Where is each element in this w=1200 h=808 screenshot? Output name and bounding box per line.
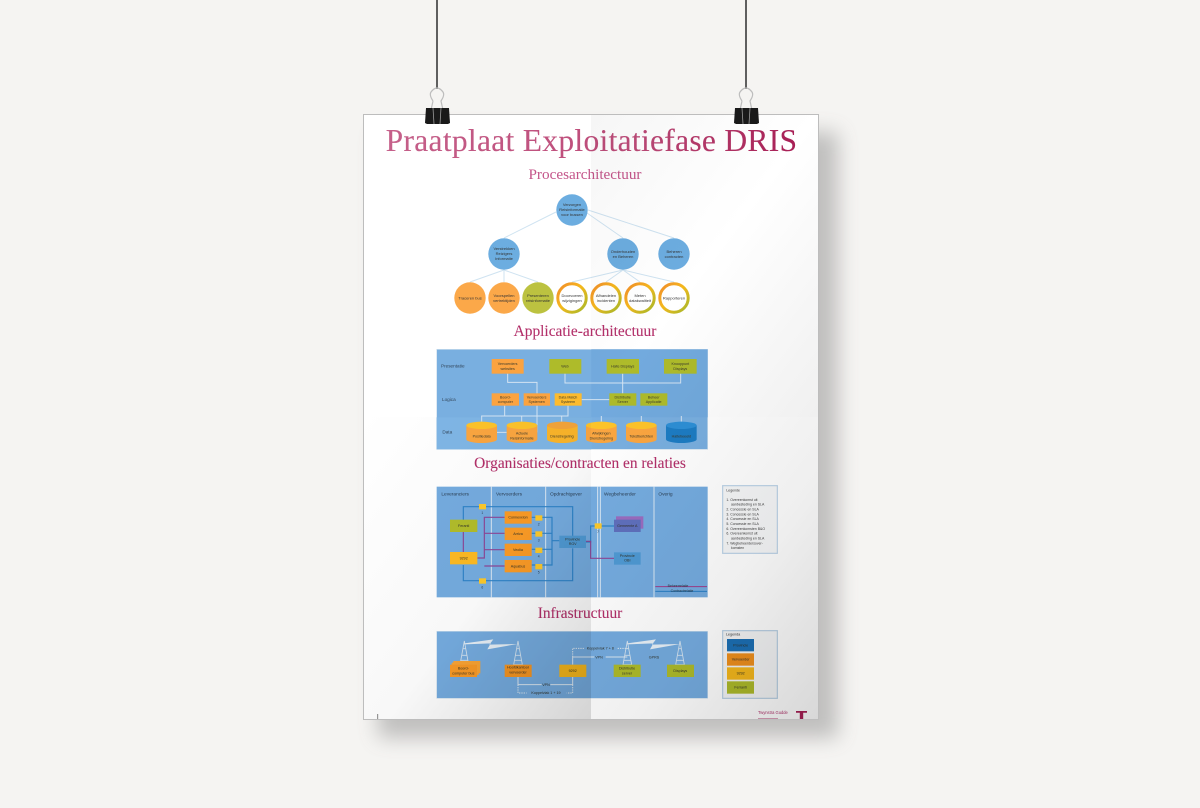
process tree diagram: Reizigers [496,251,512,256]
poster sheet [364,114,818,720]
hanging clip: left [425,0,450,124]
application architecture diagram: Dienstregeling [550,434,574,438]
application architecture diagram: Applicatie [646,400,662,404]
infrastructure diagram: Koppelvlak 1 + 19 [531,691,561,695]
legend: infrastructure: 9292 [737,672,745,676]
column headings: Overig [658,492,673,498]
infrastructure diagram [437,631,708,698]
footer logo: Twynstra Gudde [758,710,789,715]
towers [460,641,684,665]
organisations and contracts diagram: Arriva [513,532,524,536]
layer labels: Presentatie [441,364,465,369]
application architecture diagram: Halte Displays [611,365,635,369]
infrastructure diagram: computer bus [452,671,475,675]
wireless links [464,639,680,649]
process tree diagram: Afhandelen [596,293,616,298]
application architecture diagram: computer [498,400,514,404]
heading: organisaties: Organisaties/contracten en relaties [474,455,686,472]
process tree diagram: Verzorgen [563,202,581,207]
legend: contracts: 2. Concessie en SLA [726,508,760,512]
organisations and contracts diagram: 6 [481,585,483,589]
connectors [518,648,627,693]
legend: contracts: 7. Wegbeheerdersover- [726,541,763,545]
infrastructure diagram: vervoerder [509,670,528,674]
heading: infrastructuur: Infrastructuur [538,605,622,622]
column headings: Leveranciers [441,492,470,498]
layer labels: Logica [442,397,456,402]
process tree diagram: datakwaliteit [629,298,652,303]
hanging clip: right [734,0,759,124]
infrastructure diagram: VPN [542,683,550,687]
organisations and contracts diagram: Feranti [458,524,470,528]
column headings [441,492,673,498]
layer labels [441,364,465,435]
application architecture diagram: websites [501,367,515,371]
application architecture diagram: Server [617,400,629,404]
organisations and contracts diagram: 1 [481,511,483,515]
infrastructure diagram: server [622,671,633,675]
application architecture diagram: Dienstregeling [590,437,613,441]
cylinders [466,422,697,443]
process tree diagram: Beheren [666,249,682,254]
organisations and contracts diagram: 3 [538,538,540,542]
organisations and contracts diagram: Gemeente A [617,524,638,528]
heading: applicatie-architectuur: Applicatie-architectuur [514,323,656,340]
process tree diagram: Informatie [495,256,514,261]
organisations and contracts diagram: Provincie [565,538,580,542]
fold shading [364,115,818,719]
legend: contracts: 5. Concessie en SLA [726,522,760,526]
legend: contracts: 4. Concessie en SLA [726,517,760,521]
footer logo [758,710,807,719]
organisations and contracts diagram: Veolia [513,548,524,552]
application architecture diagram: Distributie [615,395,631,399]
heading: procesarchitectuur: Procesarchitectuur [528,166,642,183]
application architecture diagram: Systemen [529,400,545,404]
application architecture diagram: Actuele [516,432,528,436]
application architecture diagram [437,349,708,449]
process tree diagram: Onderhouden [611,249,635,254]
process tree diagram: en Beheren [613,254,633,259]
relation key: Contractrelatie [671,589,693,593]
contract folders [479,504,602,584]
application architecture diagram: Data Match [559,395,577,399]
application architecture diagram: Knooppunt [671,362,689,366]
legend: contracts: Legende [726,488,740,492]
application architecture diagram: Tekstberichten [630,434,653,438]
organisations and contracts diagram: Provincie [620,554,635,558]
legend: infrastructure: Legenda [726,633,741,637]
process tree diagram: Reisinformatie [559,207,586,212]
application architecture diagram: Displays [673,367,687,371]
organisations and contracts diagram: OBI [624,558,630,562]
infrastructure diagram: 9292 [569,669,577,673]
process tree diagram: wijzigingen [562,298,582,303]
legend: contracts: aanbesteding en SLA [731,536,765,540]
legend: contracts: 3. Concessie en SLA [726,512,760,516]
application architecture diagram: Vervoerders [498,362,518,366]
process tree diagram: contracten [665,254,683,259]
application architecture diagram: Afwijkingen [592,432,611,436]
legend: contracts: 6. Overeenkomst uit [726,532,758,536]
legend: infrastructure: Provincie [733,643,748,647]
layer labels: Data [442,430,453,435]
application architecture diagram: Boord- [500,395,512,399]
application architecture diagram: Web [561,365,569,369]
process tree diagram: Voorspellen [494,293,514,298]
application architecture diagram: Positiedata [473,434,492,438]
organisations and contracts diagram: 5 [538,570,540,574]
infrastructure diagram: Boord- [458,667,470,671]
process tree diagram: voor bussen [561,212,583,217]
process tree diagram: Traceren bus [458,296,482,300]
legend: infrastructure [723,631,777,698]
organisations and contracts diagram: 9292 [460,556,468,560]
boxes [452,661,480,675]
column headings: Wegbeheerder [604,492,636,498]
column headings: Vervoerders [496,492,523,498]
legend: contracts [723,486,777,553]
relation key [655,584,707,593]
infrastructure diagram: GPRS [649,656,660,660]
process tree diagram: vertrektijden [493,298,515,303]
process tree diagram: Presenteren [527,293,549,298]
infrastructure diagram: Displays [673,669,687,673]
legend: contracts: 6. Overeenkomsten B&O [726,527,765,531]
title: Praatplaat Exploitatiefase DRIS [386,123,797,158]
legend: infrastructure: Ferranti [734,686,747,690]
relation key: Beheerrelatie [668,584,688,588]
infrastructure diagram: Koppelvlak 7 + 8 [587,647,614,651]
application architecture diagram: Systeem [561,400,575,404]
organisations and contracts diagram: 2 [538,522,540,526]
process tree diagram: Doorvoeren [562,293,582,298]
process tree diagram: reisinformatie [526,298,551,303]
legend: contracts: komsten [731,546,744,550]
legend: contracts: aanbesteding en SLA [731,503,765,507]
infrastructure diagram: Hoofdkantoor [507,666,530,670]
organisations and contracts diagram: 7 [597,530,599,534]
organisations and contracts diagram: RGV [569,542,577,546]
boxes [450,520,477,532]
application architecture diagram: Reisinformatie [510,437,534,441]
infrastructure diagram: VPN [595,656,603,660]
process tree diagram: Rapporteren [663,296,685,300]
organisations and contracts diagram: Connexxion [508,516,528,520]
organisations and contracts diagram: 4 [538,554,540,558]
organisations and contracts diagram [437,487,708,597]
process tree diagram: Verstrekken [493,246,515,251]
organisations and contracts diagram: Aquabus [511,564,525,568]
application architecture diagram: Beheer [648,395,660,399]
legend: infrastructure: Vervoerder [732,658,750,662]
poster shadow [378,132,838,738]
application architecture diagram: Vervoerders [527,395,547,399]
column headings: Opdrachtgever [550,492,582,498]
legend: contracts: 1. Overeenkomst uit [726,498,758,502]
application architecture diagram: Haltebeeeld [672,434,691,438]
page mark [377,714,378,719]
process tree diagram: Meten [634,293,646,298]
process tree diagram [454,194,690,314]
process tree diagram: incidenten [597,298,615,303]
infrastructure diagram: Distributie [619,667,635,671]
